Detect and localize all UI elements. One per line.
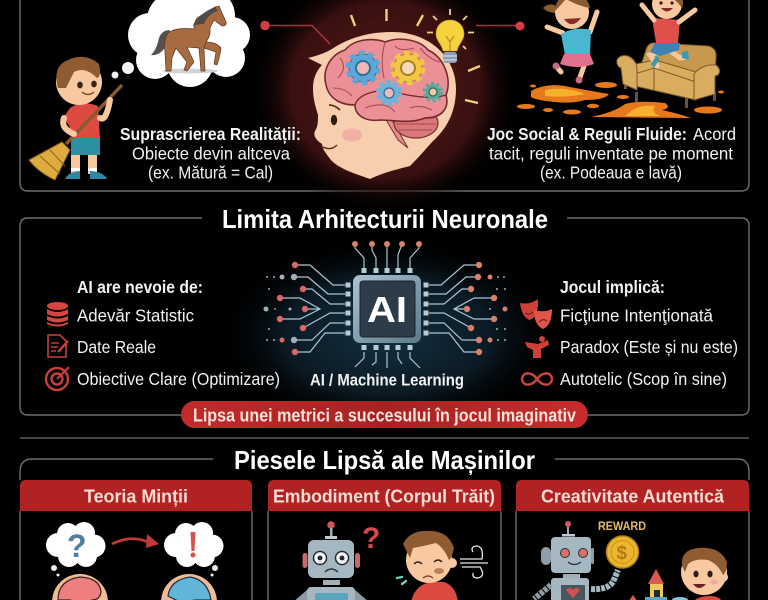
icon: theatre masks [520,299,552,329]
question mark: ? [362,522,380,555]
card: theory of mind [20,480,252,600]
icon: coin: $ [616,543,628,564]
gear: yellow [393,53,423,83]
icon: paradox figure [525,336,549,358]
right traces [429,265,494,352]
illustration: boy jumping on sofa [642,0,695,68]
gear: small blue [378,82,400,104]
head: blue brain [161,574,217,600]
icon: coin [606,536,638,568]
text: social play: tacit, reguli inventate pe moment [489,144,733,164]
column: AI needs [46,277,280,390]
icon: light bulb with rays [351,9,480,103]
text: reality overwrite: Obiecte devin altceva [132,144,290,164]
panel frame [20,459,749,480]
icon: database [47,302,68,326]
panel: missing pieces [20,445,749,600]
AI chip with circuit [264,241,508,368]
text: social play [487,124,736,182]
card frame [516,511,749,600]
icon: infinity [522,373,552,385]
card header [268,480,501,511]
face [323,105,362,149]
illustration: girl jumping [543,0,597,84]
head: red brain [52,574,108,600]
panel: neural architecture limit [20,204,749,433]
illustration: boy with broom [29,57,122,180]
divider line [20,437,749,439]
column: AI needs: Obiective Clare (Optimizare) [77,369,280,389]
text: reality overwrite: (ex. Mătură = Cal) [148,162,273,182]
illustration: sofa [617,43,720,108]
label: reward: REWARD [598,521,646,533]
card: embodiment: Embodiment (Corpul Trăit) [273,486,495,506]
text: social play: Joc Social & Reguli Fluide: [487,124,687,144]
card: authentic creativity: Creativitate Autentică [541,486,725,506]
card frame [20,511,252,600]
robot: confused [293,521,369,600]
robot: reward [534,521,618,600]
column: AI needs: AI are nevoie de: [77,277,203,297]
callout: missing metric: Lipsa unei metrici a succesului în jocul imaginativ [193,406,576,426]
boy: playing [681,548,728,600]
brain glow [250,0,520,215]
chip glow [215,238,560,433]
column: play involves [520,277,738,389]
panel frame [20,218,749,415]
icon: wind [460,546,488,578]
head [308,32,456,179]
brain [325,39,448,148]
connector: right dot [476,22,524,30]
illustration: head with brain [308,32,456,179]
text: reality overwrite: Suprascrierea Realității: [120,124,301,144]
column: play involves: Autotelic (Scop în sine) [560,369,727,389]
icon: target [46,367,69,390]
illustration: thought cloud with horse [112,0,250,87]
thought cloud: question [46,522,106,576]
card: theory of mind: Teoria Minții [84,486,188,506]
gear: teal [424,84,442,100]
panel: imaginative play [20,0,749,215]
gear: blue [348,53,378,83]
thought cloud: question: ? [67,528,87,564]
horse [151,6,226,71]
heading: Piesele Lipsă ale Mașinilor [234,445,535,475]
illustration: lava puddles [517,82,724,118]
card: embodiment [268,480,501,600]
top and bottom traces [355,244,420,368]
card header [516,480,749,511]
card frame [268,511,501,600]
text: reality overwrite [120,124,301,182]
thought cloud: exclamation [164,522,224,576]
card: authentic creativity [516,480,749,600]
text: social play: Acord [693,124,736,144]
icon: document [48,335,68,357]
toy castle [628,569,688,600]
card header [20,480,252,511]
panel frame [20,0,749,191]
arrow [112,534,159,548]
callout: missing metric [181,401,588,428]
chip caption: AI / Machine Learning [310,372,464,390]
column: play involves: Jocul implică: [560,277,665,297]
AI chip with circuit: AI [367,289,407,330]
column: play involves: Ficţiune Intenţionată [560,306,713,326]
connector: left dot [260,21,330,44]
text: social play: (ex. Podeaua e lavă) [540,162,682,182]
left traces [280,265,345,352]
column: play involves: Paradox (Este și nu este) [560,337,738,357]
column: AI needs: Adevăr Statistic [77,306,194,326]
boy: hurt [397,531,458,600]
column: AI needs: Date Reale [77,337,156,357]
heading: Limita Arhitecturii Neuronale [222,204,548,234]
